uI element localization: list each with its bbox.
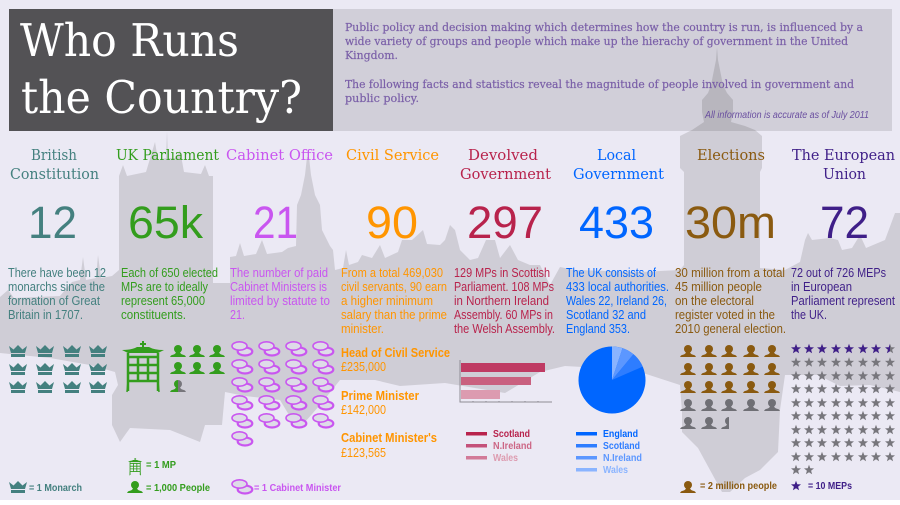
heading: Cabinet Office <box>226 146 333 164</box>
description <box>675 266 786 336</box>
description: England 353. <box>566 322 630 336</box>
description: represent 65,000 <box>121 294 205 308</box>
panel: UK Parliament <box>116 146 225 494</box>
description: a higher minimum <box>341 294 433 308</box>
pie legend <box>576 428 642 476</box>
intro text: wide variety of groups and people which make up the hierachy of government in the United <box>345 35 848 48</box>
big number: 30m <box>685 197 776 248</box>
crown pictogram <box>9 345 107 393</box>
legend: = 1 MP <box>146 459 176 471</box>
description: The UK consists of <box>566 266 656 280</box>
bar chart <box>460 360 552 402</box>
description: MPs are to ideally <box>121 280 209 294</box>
description: Parliament. 108 MPs <box>454 280 554 294</box>
salaries list: £235,000 <box>341 360 386 374</box>
panel: title block <box>9 9 333 131</box>
description <box>230 266 330 322</box>
pie legend: Wales <box>603 464 628 476</box>
title <box>20 14 302 124</box>
panel: Civil Service <box>341 146 450 460</box>
title: Who Runs <box>20 14 239 67</box>
description: in European <box>791 280 852 294</box>
heading: Devolved <box>468 146 538 164</box>
people pictogram <box>170 345 225 392</box>
description: From a total 469,030 <box>341 266 443 280</box>
heading: British <box>31 146 77 164</box>
salaries list: £123,565 <box>341 446 386 460</box>
heading: Government <box>573 165 664 183</box>
legend <box>791 480 852 492</box>
heading: Civil Service <box>346 146 439 164</box>
big number: 433 <box>579 197 654 248</box>
description: Assembly. 60 MPs in <box>454 308 553 322</box>
heading: UK Parliament <box>116 146 219 164</box>
description: minister. <box>341 322 384 336</box>
big number: 21 <box>253 197 298 248</box>
legend <box>9 481 82 494</box>
pie chart <box>578 346 646 414</box>
heading: The European <box>792 146 895 164</box>
heading <box>792 146 895 183</box>
salaries list: Head of Civil Service <box>341 346 450 360</box>
description: monarchs since the <box>8 280 105 294</box>
panel: Devolved Government <box>454 146 555 464</box>
pie legend: N.Ireland <box>603 452 642 464</box>
legend: = 10 MEPs <box>808 480 852 492</box>
salaries list: Cabinet Minister's <box>341 431 437 445</box>
coin pictogram <box>232 342 333 446</box>
panel: British Constitution <box>8 146 107 494</box>
description: The number of paid <box>230 266 328 280</box>
description: 45 million people <box>675 280 762 294</box>
description: civil servants, 90 earn <box>341 280 447 294</box>
description: on the electoral <box>675 294 754 308</box>
big number: 297 <box>467 197 543 248</box>
bar legend: Wales <box>493 452 518 464</box>
heading: Government <box>460 165 551 183</box>
heading: Elections <box>697 146 765 164</box>
description <box>121 266 218 322</box>
intro text: Kingdom. <box>345 49 398 62</box>
panel: Elections <box>675 146 786 493</box>
title: the Country? <box>21 71 302 124</box>
heading: Constitution <box>10 165 99 183</box>
description <box>566 266 669 336</box>
legend: = 1 Monarch <box>29 482 82 494</box>
intro text: The following facts and statistics reveal the magnitude of people involved in government and <box>345 78 854 91</box>
pie legend: Scotland <box>603 440 640 452</box>
description: 30 million from a total <box>675 266 785 280</box>
legend <box>680 480 777 493</box>
salaries list <box>341 346 450 460</box>
voter pictogram <box>680 345 780 429</box>
bar legend: N.Ireland <box>493 440 532 452</box>
bar legend <box>466 428 532 464</box>
description: Cabinet Ministers is <box>230 280 327 294</box>
description: Each of 650 elected <box>121 266 218 280</box>
intro text: Public policy and decision making which determines how the country is run, is influenced by a <box>345 21 863 34</box>
big number: 72 <box>820 197 869 248</box>
accuracy note: All information is accurate as of July 2011 <box>704 110 869 121</box>
description <box>454 266 555 336</box>
description: formation of Great <box>8 294 100 308</box>
description: Wales 22, Ireland 26, <box>566 294 667 308</box>
description <box>341 266 447 336</box>
description: 2010 general election. <box>675 322 786 336</box>
heading <box>573 146 664 183</box>
description: There have been 12 <box>8 266 106 280</box>
big number: 12 <box>28 197 77 248</box>
intro text <box>345 21 863 105</box>
pie legend: England <box>603 428 638 440</box>
legend <box>127 458 210 494</box>
panel: The European Union <box>791 146 895 492</box>
star pictogram <box>791 344 895 474</box>
description: Britain in 1707. <box>8 308 83 322</box>
description: 72 out of 726 MEPs <box>791 266 886 280</box>
description: 433 local authorities. <box>566 280 669 294</box>
description: limited by statute to <box>230 294 330 308</box>
description <box>8 266 106 322</box>
description <box>791 266 895 322</box>
intro text: public policy. <box>345 92 419 105</box>
bar legend: Scotland <box>493 428 530 440</box>
panel: introduction <box>333 9 892 131</box>
salaries list: £142,000 <box>341 403 386 417</box>
legend: = 1,000 People <box>146 482 210 494</box>
big number: 65k <box>128 197 204 248</box>
description: Scotland 32 and <box>566 308 646 322</box>
heading: Union <box>823 165 866 183</box>
heading <box>460 146 551 183</box>
legend: = 1 Cabinet Minister <box>254 482 341 494</box>
heading: Local <box>597 146 636 164</box>
panel: Local Government <box>566 146 669 476</box>
description: the Welsh Assembly. <box>454 322 555 336</box>
portcullis pictogram <box>122 341 164 392</box>
panel: Cabinet Office <box>226 146 341 494</box>
big number: 90 <box>366 197 418 248</box>
description: the UK. <box>791 308 827 322</box>
description: constituents. <box>121 308 186 322</box>
salaries list: Prime Minister <box>341 389 419 403</box>
description: salary than the prime <box>341 308 447 322</box>
description: in Northern Ireland <box>454 294 549 308</box>
description: register voted in the <box>675 308 775 322</box>
description: 129 MPs in Scottish <box>454 266 550 280</box>
heading <box>10 146 99 183</box>
legend <box>232 480 341 494</box>
description: 21. <box>230 308 245 322</box>
legend: = 2 million people <box>700 480 777 492</box>
